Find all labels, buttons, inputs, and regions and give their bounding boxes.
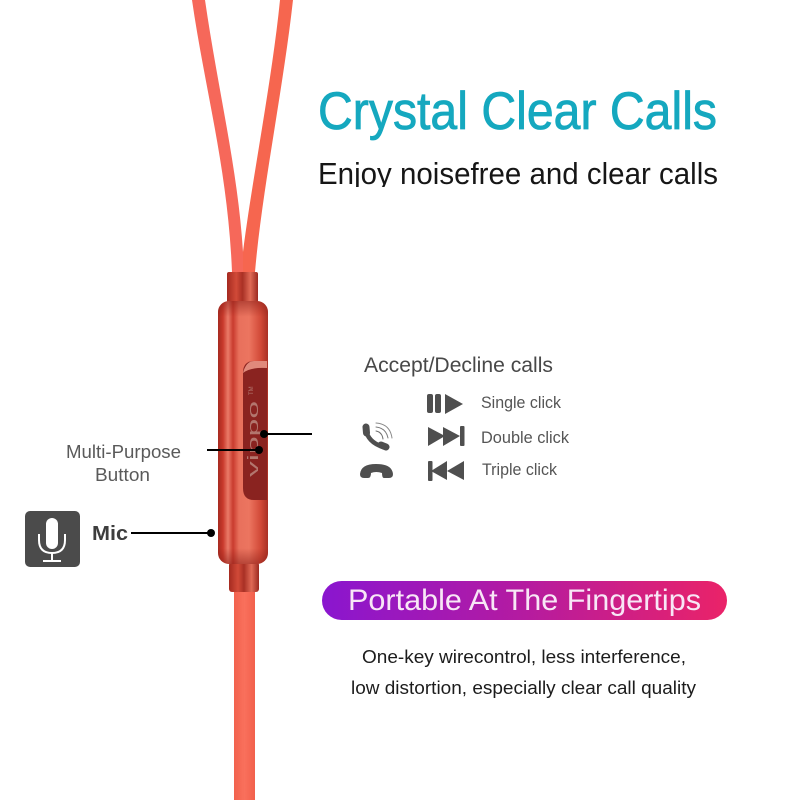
callout line: multi-purpose button: [207, 446, 263, 454]
heading: accept/decline calls: Accept/Decline calls: [364, 354, 553, 377]
description text: [351, 647, 696, 698]
icon: play/pause: [427, 394, 463, 414]
icon: microphone: [25, 511, 80, 567]
brand mark: vippo: [245, 401, 262, 477]
label: multi-purpose button: [66, 442, 181, 485]
callout line: mic: [131, 529, 215, 537]
right upper cable: [243, 0, 293, 272]
label: multi-purpose button: Button: [95, 465, 150, 485]
left upper cable: [192, 0, 243, 272]
icon: end call: [360, 464, 393, 478]
earphone cable and inline remote: [192, 0, 293, 800]
description text: One-key wirecontrol, less interference,: [362, 647, 686, 667]
icon: previous track: [428, 461, 464, 481]
label: triple click: Triple click: [482, 460, 557, 479]
label: double click: Double click: [481, 428, 569, 447]
bottom collar: [229, 562, 259, 592]
brand mark: TM: [249, 386, 255, 395]
title: Crystal Clear Calls: [318, 82, 717, 141]
subtitle: Enjoy noisefree and clear calls: [318, 156, 718, 191]
icon: next track: [428, 426, 464, 446]
label: single click: Single click: [481, 393, 561, 412]
icon: incoming call: [366, 423, 392, 447]
description text: low distortion, especially clear call quality: [351, 678, 696, 698]
top collar: [227, 272, 258, 304]
callout line: button to controls: [260, 430, 312, 438]
remote body: [218, 301, 268, 564]
label: multi-purpose button: Multi-Purpose: [66, 442, 181, 462]
banner: portable at the fingertips: Portable At The Fingertips: [348, 584, 701, 617]
lower cable: [234, 590, 255, 800]
brand mark: [245, 386, 262, 477]
label: mic: Mic: [92, 523, 128, 545]
remote button: [243, 361, 267, 500]
